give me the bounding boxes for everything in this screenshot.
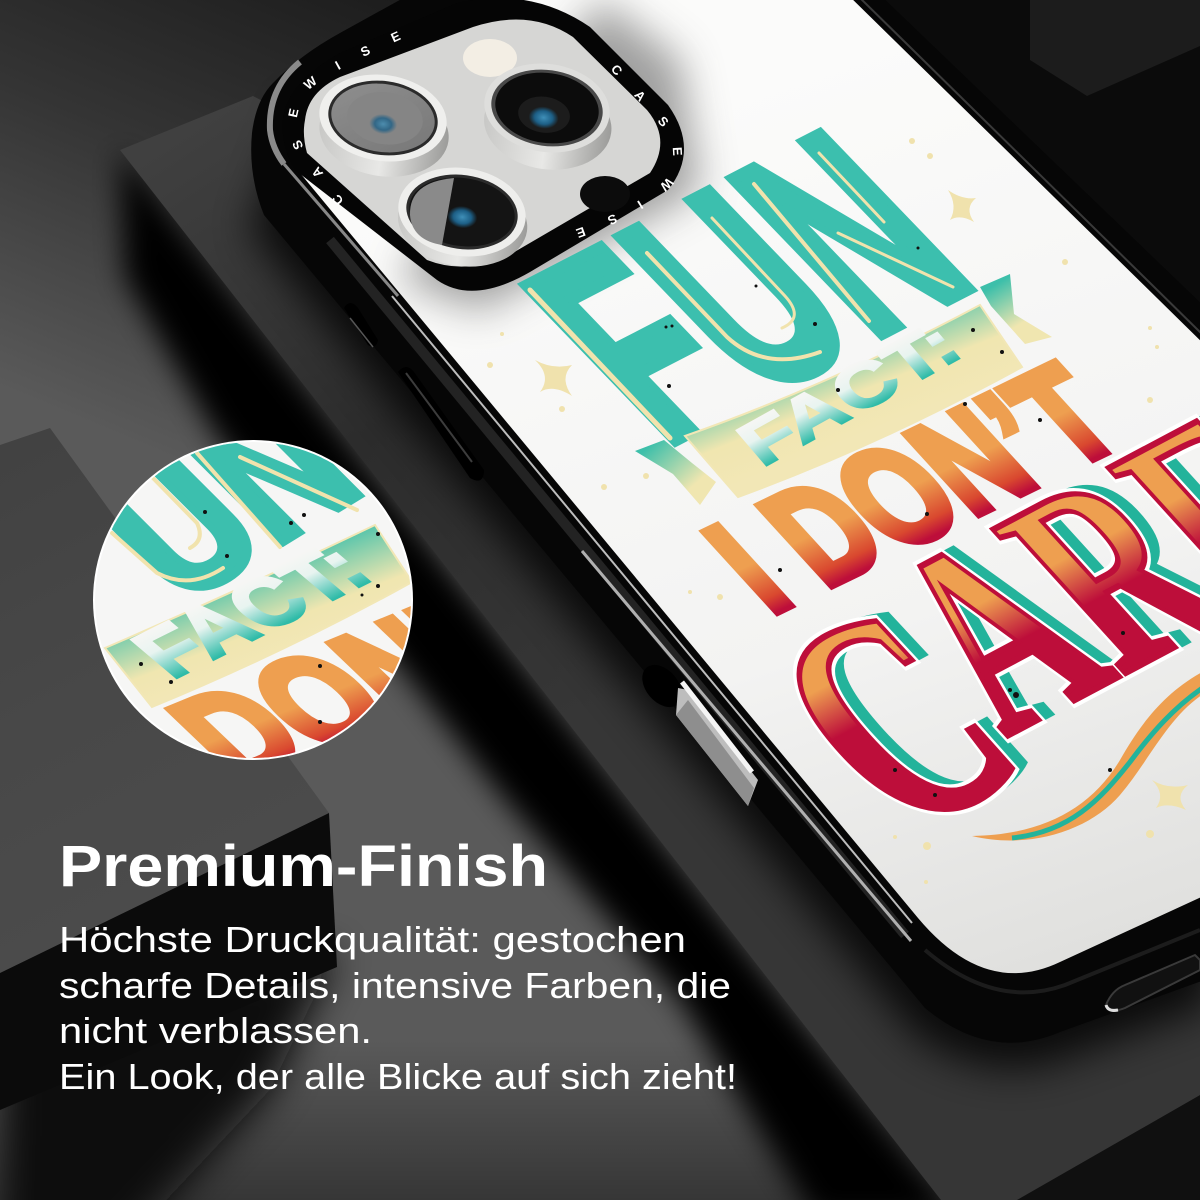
banner: [685, 305, 1022, 497]
phone shadow: [250, 100, 1200, 1068]
silver side button: [634, 657, 758, 806]
circle: banner: [105, 525, 412, 707]
case lower lip: [925, 930, 1200, 992]
circle: cream inlines: [112, 453, 357, 580]
flash: [463, 39, 517, 77]
CASEWISE ring text left: CASEWISE: [288, 31, 401, 204]
rim highlight: [270, 62, 300, 164]
rim band: [330, 240, 905, 935]
CARE lettering: C: [704, 548, 1082, 890]
platform side face: [120, 150, 960, 1200]
circle: speckles: [139, 510, 380, 724]
microphone hole: [580, 176, 630, 212]
body copy: [59, 919, 737, 1097]
phone screen artwork surface: [300, 0, 1200, 973]
artwork on phone: [400, 0, 1200, 890]
circle: UN lettering: UN: [58, 368, 397, 634]
lens top-right: [476, 56, 619, 178]
circle: DON'T lettering: DON’T: [139, 553, 594, 808]
I DON'T lettering: I DON’T: [675, 337, 1152, 640]
heading: Premium-Finish: [59, 834, 548, 899]
body copy: Höchste Druckqualität: gestochen: [59, 919, 686, 960]
body copy: nicht verblassen.: [59, 1010, 372, 1051]
FUN lettering: FUN: [467, 79, 1028, 495]
body copy: Ein Look, der alle Blicke auf sich zieht!: [59, 1056, 737, 1097]
FACT lettering: FACT:: [723, 309, 975, 479]
banner: left tail: [635, 440, 716, 505]
CASEWISE ring text right: CASEWISE: [576, 65, 682, 238]
phone case: [251, 0, 1200, 1043]
side button long: [398, 367, 484, 481]
star and dots: [487, 138, 1188, 884]
lens bottom: [391, 160, 534, 275]
CARE shadow: C: [716, 542, 1094, 884]
body copy: scharfe Details, intensive Farben, die: [59, 965, 731, 1006]
side button small: [344, 303, 378, 347]
USB-C port: [1106, 955, 1200, 1010]
lower-left block: [0, 428, 337, 1200]
camera window: [304, 19, 660, 267]
camera shadow on screen: [400, 0, 700, 310]
swoosh: [972, 668, 1200, 841]
banner: right tail: [980, 274, 1052, 344]
CARE halo: C: [704, 548, 1082, 890]
camera island: [288, 0, 684, 291]
speckles: [664, 246, 1125, 797]
lens top-left: [312, 67, 456, 185]
zoom circle: [93, 440, 413, 760]
circle: FACT lettering: FACT:: [113, 528, 390, 692]
FUN lettering: [517, 126, 978, 448]
